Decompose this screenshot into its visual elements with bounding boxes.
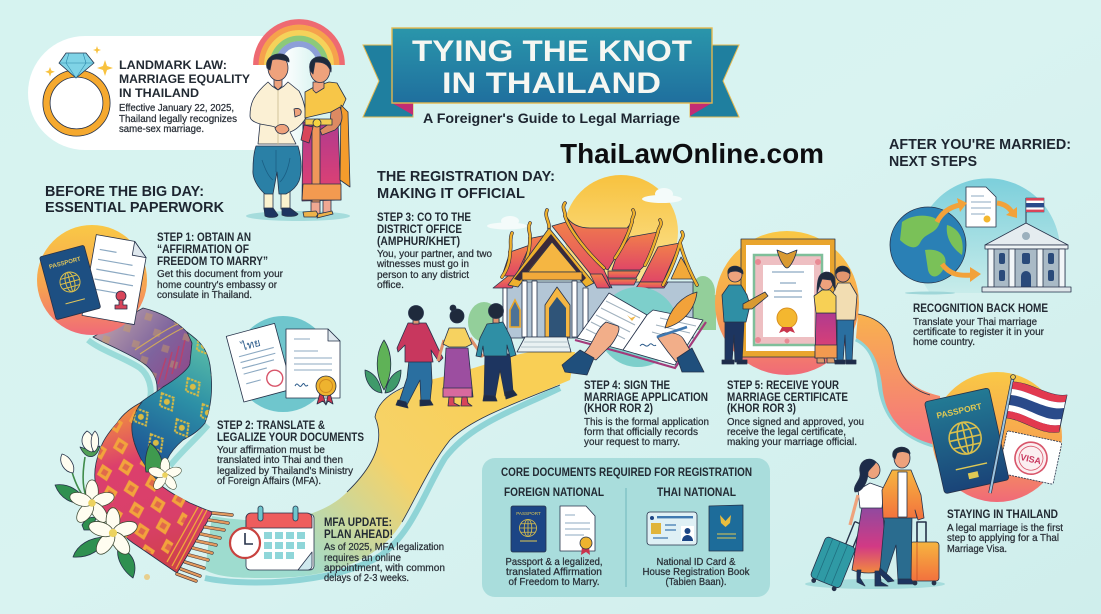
recognition text <box>913 301 1048 348</box>
icon: diamond ring <box>45 46 113 132</box>
MFA update text: appointment, with common <box>324 563 445 574</box>
icon: Thai flag <box>990 375 1067 493</box>
recognition text: RECOGNITION BACK HOME <box>913 301 1048 315</box>
MFA update text: As of 2025, MFA legalization <box>324 542 444 553</box>
scarf fringe <box>177 513 232 581</box>
step 4 text <box>584 378 709 448</box>
icon: legalized document <box>286 329 340 405</box>
road: golden path to the temple <box>205 352 575 583</box>
step 2 text: Your affirmation must be <box>217 445 325 456</box>
title text: TYING THE KNOT <box>412 35 692 68</box>
temple gold bargeboards <box>502 203 697 285</box>
step 4 text: your request to marry. <box>584 437 680 448</box>
caption <box>642 557 750 588</box>
step 2 text: LEGALIZE YOUR DOCUMENTS <box>217 430 364 444</box>
caption: National ID Card & <box>656 557 736 568</box>
heading: after you're married: NEXT STEPS <box>889 153 977 170</box>
staying in Thailand text: step to applying for a Thal <box>947 533 1059 544</box>
recognition text: Translate your Thai marriage <box>913 317 1037 328</box>
title text: IN THAILAND <box>442 67 661 100</box>
step 1 text: Get this document from your <box>157 269 284 280</box>
icon: rainbow <box>256 22 342 65</box>
caption: translated Affirmation <box>506 567 602 578</box>
icon: visa card: VISA <box>1019 452 1043 466</box>
illustration: couple with luggage <box>805 447 945 592</box>
caption: (Tabien Baan). <box>666 577 726 588</box>
woman with luggage <box>850 459 888 586</box>
illustration: Thai temple <box>493 203 697 352</box>
step 4 illustration: signing the register <box>562 287 706 375</box>
title banner <box>363 28 739 126</box>
step 2 text <box>217 418 364 487</box>
column: Thai national <box>642 485 750 588</box>
caption: Passport & a legalized, <box>506 557 602 568</box>
caption: of Freedom to Marry. <box>508 577 600 588</box>
step 1 text: home country's embassy or <box>157 280 278 291</box>
subtitle: A Foreigner's Guide to Legal Marriage <box>423 110 680 126</box>
scarf top section <box>93 308 192 392</box>
temple columns <box>503 281 588 337</box>
icon: sun behind temple <box>564 175 678 289</box>
step 3 text <box>376 210 492 291</box>
MFA update text: requires an online <box>324 553 401 564</box>
step 1 illustration <box>37 225 148 335</box>
step 1 text <box>157 230 284 301</box>
step 3 text: person to any district <box>377 270 469 281</box>
step 4 text: STEP 4: SIGN THE <box>584 378 670 392</box>
MFA update text <box>324 515 445 584</box>
step 4 text: (KHOR ROR 2) <box>584 401 653 415</box>
icon: ID card <box>647 512 697 545</box>
icon: big passport: PASSPORT <box>935 401 983 421</box>
road: orange path to the passport <box>856 314 945 448</box>
step 5 text <box>727 378 864 448</box>
step 5 text: STEP 5: RECEIVE YOUR <box>727 378 839 392</box>
icon: house registration book <box>709 505 743 551</box>
step 3 text: You, your partner, and two <box>377 249 492 260</box>
landmark law panel <box>28 36 318 150</box>
step 5 text: MARRIAGE CERTIFICATE <box>727 390 848 404</box>
temple window <box>510 300 520 327</box>
step 5 text: receive the legal certificate, <box>727 427 846 438</box>
walker blue shirt <box>476 304 517 401</box>
staying in Thailand text <box>947 507 1063 555</box>
step 3 text: witnesses must go in <box>376 259 469 270</box>
icon: document <box>966 187 996 227</box>
icon: big passport <box>924 388 1009 494</box>
temple roofs <box>493 216 680 288</box>
MFA update text: MFA UPDATE: <box>324 515 392 529</box>
heading: registration day: THE REGISTRATION DAY: <box>377 168 555 185</box>
scarf middle section <box>131 332 212 488</box>
text: landmark law: same-sex marriage. <box>119 124 204 135</box>
teal suitcase <box>808 514 865 592</box>
staying in Thailand text: STAYING IN THAILAND <box>947 507 1058 521</box>
icon: visa card <box>998 431 1062 484</box>
step 1 text: “AFFIRMATION OF <box>157 242 249 256</box>
scarf shadow <box>88 340 208 466</box>
step 5 text: (KHOR ROR 3) <box>727 401 796 415</box>
walker woman <box>438 305 483 406</box>
certificate frame <box>741 239 835 357</box>
heading: before the big day: BEFORE THE BIG DAY: <box>45 183 204 200</box>
recognition text: certificate to register it in your <box>913 327 1045 338</box>
temple door <box>545 287 570 337</box>
caption: House Registration Book <box>642 567 750 578</box>
icon: small passport: PASSPORT <box>516 511 541 516</box>
MFA update text: delays of 2-3 weeks. <box>324 573 409 584</box>
text: landmark law: MARRIAGE EQUALITY <box>119 72 250 86</box>
heading: registration day <box>377 168 555 202</box>
clouds <box>487 188 682 230</box>
temple steps <box>517 337 571 352</box>
heading: before the big day <box>45 183 224 216</box>
step 5 text: Once signed and approved, you <box>727 417 864 428</box>
step 2 text: translated into Thai and then <box>217 455 343 466</box>
website: ThaiLawOnline.com <box>560 138 824 169</box>
step 5 text: making your marriage official. <box>727 437 857 448</box>
text: landmark law: Thailand legally recognizes <box>119 114 237 125</box>
calendar and clock icon <box>230 506 314 570</box>
step 1 text: STEP 1: OBTAIN AN <box>157 230 251 244</box>
heading: after you're married <box>889 136 1071 170</box>
step 4 text: This is the formal application <box>584 417 709 428</box>
icon: government building <box>982 223 1071 292</box>
step 5 illustration: marriage certificate <box>715 231 859 375</box>
step 4 text: MARRIAGE APPLICATION <box>584 390 708 404</box>
caption <box>506 557 602 588</box>
officer <box>722 266 768 364</box>
illustration: couple and witness walking <box>396 304 517 408</box>
bride and groom <box>814 266 857 364</box>
temple gold trim <box>502 203 697 285</box>
step 2 text: STEP 2: TRANSLATE & <box>217 418 325 432</box>
heading: before the big day: ESSENTIAL PAPERWORK <box>45 199 224 216</box>
illustration: recognition back home <box>890 178 1071 294</box>
icon: plant <box>365 340 401 393</box>
panel heading: CORE DOCUMENTS REQUIRED FOR REGISTRATION <box>501 465 752 479</box>
woman <box>301 57 350 218</box>
heading: registration day: MAKING IT OFFICIAL <box>377 185 525 202</box>
icon: stamp <box>115 291 127 309</box>
step 2 illustration <box>226 316 340 412</box>
temple right gable <box>671 257 694 279</box>
orange suitcase <box>910 522 939 585</box>
step 3 text: office. <box>377 280 404 291</box>
jasmine flowers <box>55 431 183 580</box>
column: Thai national: THAI NATIONAL <box>657 485 736 499</box>
icon: arrows <box>937 203 1013 275</box>
column: foreign national: FOREIGN NATIONAL <box>504 485 604 499</box>
temple walls <box>503 282 693 338</box>
panel: core documents <box>482 458 770 597</box>
icon: flag <box>1026 198 1044 223</box>
step 3 text: STEP 3: CO TO THE <box>377 210 471 224</box>
text: landmark law <box>119 58 250 135</box>
illustration: couple in Thai dress <box>246 54 350 221</box>
recognition text: home country. <box>913 337 975 348</box>
icon: globe <box>890 207 966 283</box>
staying in Thailand text: A legal marriage is the first <box>947 523 1063 534</box>
illustration: silk scarf <box>55 308 232 581</box>
step 1 text: FREEDOM TO MARRY” <box>157 254 268 268</box>
step 4 text: form that officially records <box>584 427 698 438</box>
MFA update text: PLAN AHEAD! <box>324 527 393 541</box>
bush behind temple <box>468 276 716 342</box>
text: landmark law: LANDMARK LAW: <box>119 58 227 72</box>
text: landmark law: IN THAILAND <box>119 86 199 100</box>
step 3 text: DISTRICT OFFICE <box>377 222 462 236</box>
column: foreign national <box>504 485 604 588</box>
scarf bottom section <box>95 402 213 573</box>
man with luggage <box>879 447 924 584</box>
step 2 text: of Foreign Affairs (MFA). <box>217 476 321 487</box>
temple front gable <box>508 228 594 287</box>
man <box>250 54 306 217</box>
step 3 text: (AMPHUR/KHET) <box>377 234 460 248</box>
step 1 text: consulate in Thailand. <box>157 290 252 301</box>
icon: passport: PASSPORT <box>49 256 82 271</box>
staying in Thailand text: Marriage Visa. <box>947 544 1007 555</box>
icon: document <box>82 235 148 325</box>
walker red shirt <box>396 306 443 408</box>
illustration: passport, flag and visa <box>924 372 1067 502</box>
step 2 text: legalized by Thailand's Ministry <box>217 466 353 477</box>
icon: small document <box>560 506 595 555</box>
heading: after you're married: AFTER YOU'RE MARRIED: <box>889 136 1071 153</box>
text: landmark law: Effective January 22, 2025, <box>119 103 234 114</box>
icon: Thai document: ไทย <box>239 336 262 354</box>
title text <box>412 35 692 100</box>
